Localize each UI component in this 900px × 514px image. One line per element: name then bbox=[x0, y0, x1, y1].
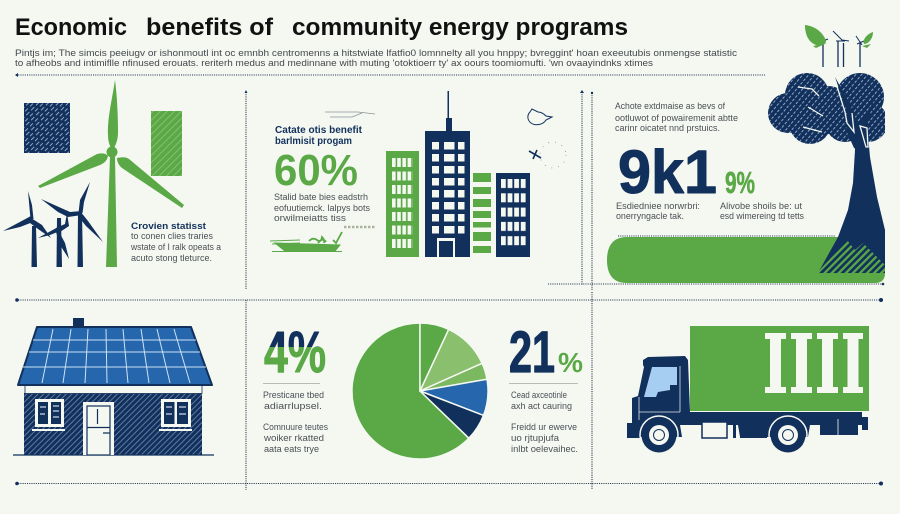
cab outlines bbox=[639, 366, 680, 420]
sketch lines bbox=[325, 112, 375, 117]
text block: 4% notes bbox=[263, 384, 328, 454]
text block: 21% notes: uo rjtupjufa bbox=[511, 433, 559, 443]
panel: solar house bbox=[13, 318, 214, 455]
text block: 60% description bbox=[274, 192, 370, 223]
door bbox=[83, 402, 114, 455]
text block: 60% description: Stalid bate bies eadstrh bbox=[274, 192, 368, 202]
stat: 21%: % bbox=[558, 347, 583, 378]
text block: stat caption right: esd wimereing td tetts bbox=[720, 211, 804, 221]
cargo bars bbox=[765, 333, 863, 393]
text block: turbine statistic: acuto stong tleturce. bbox=[131, 253, 212, 263]
trunk green stripes bbox=[817, 240, 885, 273]
text block: stat caption left: Esdiedniee norwrbri: bbox=[616, 201, 700, 211]
text block: 60% description: eofuutiemck. lalpys bots bbox=[274, 203, 370, 213]
icon: plane and dotted circle bbox=[529, 142, 566, 168]
icon: small navy building bbox=[496, 173, 530, 257]
cargo box bbox=[690, 326, 869, 411]
text block: savings intro: carinr oicatet nnd prstuics. bbox=[615, 123, 720, 133]
tree canopy bbox=[768, 73, 888, 148]
panel: pie chart statistics bbox=[263, 320, 583, 459]
text block: stat caption right bbox=[720, 201, 804, 221]
text block: savings intro bbox=[615, 101, 738, 133]
storage boxes bbox=[702, 417, 868, 438]
text block: 60% description: orwilmeiatts tiss bbox=[274, 213, 347, 223]
text block: turbine statistic: to conen clies traries bbox=[131, 231, 213, 241]
stat: 9%: 9% bbox=[725, 165, 755, 200]
icon: green delivery truck bbox=[627, 326, 869, 454]
panel: city benefit bbox=[270, 91, 566, 257]
text block: 21% notes: Freidd ur ewerve bbox=[511, 422, 577, 432]
icon: green stacked strips bbox=[473, 173, 491, 253]
solar roof bbox=[18, 327, 212, 385]
stat: 21%: 21 bbox=[509, 320, 555, 385]
text block: 4% notes: Comnuure teutes bbox=[263, 422, 328, 432]
icon: large green wind turbine bbox=[38, 80, 184, 267]
cab and chassis bbox=[627, 356, 862, 438]
text block: stat caption right: Alivobe shoils be: ut bbox=[720, 201, 803, 211]
text block: 4% notes: adiarrlupsel. bbox=[264, 401, 322, 411]
text block: 21% notes bbox=[509, 384, 578, 454]
panel: wind turbines bbox=[3, 80, 221, 267]
title bbox=[15, 14, 628, 41]
ground line bbox=[13, 454, 214, 456]
front wheel bbox=[640, 416, 678, 454]
text block: 4% notes: aata eats trye bbox=[264, 444, 319, 454]
hatched navy square bbox=[24, 103, 70, 153]
soffit bbox=[25, 385, 202, 394]
intro text bbox=[15, 48, 737, 69]
intro text: Pintjs im; The simcis peeiugv or ishonmoutl int oc emnbh centromenns a hitstwiate lfatfio0 lomnnelty all you hnppy; bvreggint' hoan exeeutubis onmengse statistic bbox=[15, 48, 737, 59]
icon: green building bbox=[386, 151, 419, 257]
green leaves bbox=[805, 25, 873, 48]
heading: city benefit: barlmisit progam bbox=[275, 136, 352, 147]
text block: stat caption left bbox=[616, 201, 700, 221]
green pill banner bbox=[607, 237, 885, 283]
tree trunk bbox=[818, 135, 885, 273]
text block: turbine statistic: Crovien statisst bbox=[131, 221, 207, 232]
text block: savings intro: Achote extdmaise as bevs of bbox=[615, 101, 725, 111]
title: community energy programs bbox=[292, 14, 628, 41]
left window bbox=[32, 399, 65, 431]
heading: city benefit: Catate otis benefit bbox=[275, 125, 363, 136]
small turbines on top bbox=[818, 31, 864, 67]
icon: bird outline bbox=[528, 109, 552, 125]
panel: savings statistics bbox=[615, 101, 804, 221]
stat: 4%: 4% bbox=[264, 320, 326, 385]
pie chart bbox=[352, 323, 488, 459]
icon: tree with small turbines bbox=[768, 25, 888, 273]
text block: 21% notes: inlbt oelevaihec. bbox=[511, 444, 578, 454]
intro text: to afheobs and intimiflle nfinused erouats. reriterh medus and medinnane with muting 'otoktioerr ty' ax oours toomiomufti. 'wn ovaayindnks xtimes bbox=[15, 58, 653, 69]
text block: turbine statistic bbox=[130, 221, 221, 263]
heading: city benefit bbox=[275, 125, 363, 147]
icon: navy tower bbox=[425, 91, 470, 257]
text block: 21% notes: axh act cauring bbox=[511, 401, 572, 411]
title: benefits of bbox=[146, 14, 274, 41]
text block: stat caption left: onerryngacle tak. bbox=[616, 211, 684, 221]
rear wheel bbox=[769, 416, 807, 454]
cab window bbox=[644, 367, 677, 397]
text block: savings intro: ootluwot of powairemenit abtte bbox=[615, 113, 738, 123]
text block: turbine statistic: wstate of I ralk opeats a bbox=[130, 242, 221, 252]
stat: 9k1: 9k1 bbox=[618, 138, 717, 206]
icon: small navy wind turbines bbox=[3, 182, 103, 267]
text block: 21% notes: Cead axceotinle bbox=[511, 390, 567, 400]
house wall bbox=[24, 393, 202, 455]
stat: 60%: 60% bbox=[274, 146, 358, 195]
hatched green rectangle bbox=[151, 111, 182, 176]
right window bbox=[159, 399, 192, 431]
text block: 4% notes: woiker rkatted bbox=[263, 433, 324, 443]
text block: 4% notes: Presticane tbed bbox=[263, 390, 324, 400]
title: Economic bbox=[15, 14, 127, 41]
chimney bbox=[73, 318, 84, 328]
icon: green boat with check bbox=[270, 227, 375, 252]
